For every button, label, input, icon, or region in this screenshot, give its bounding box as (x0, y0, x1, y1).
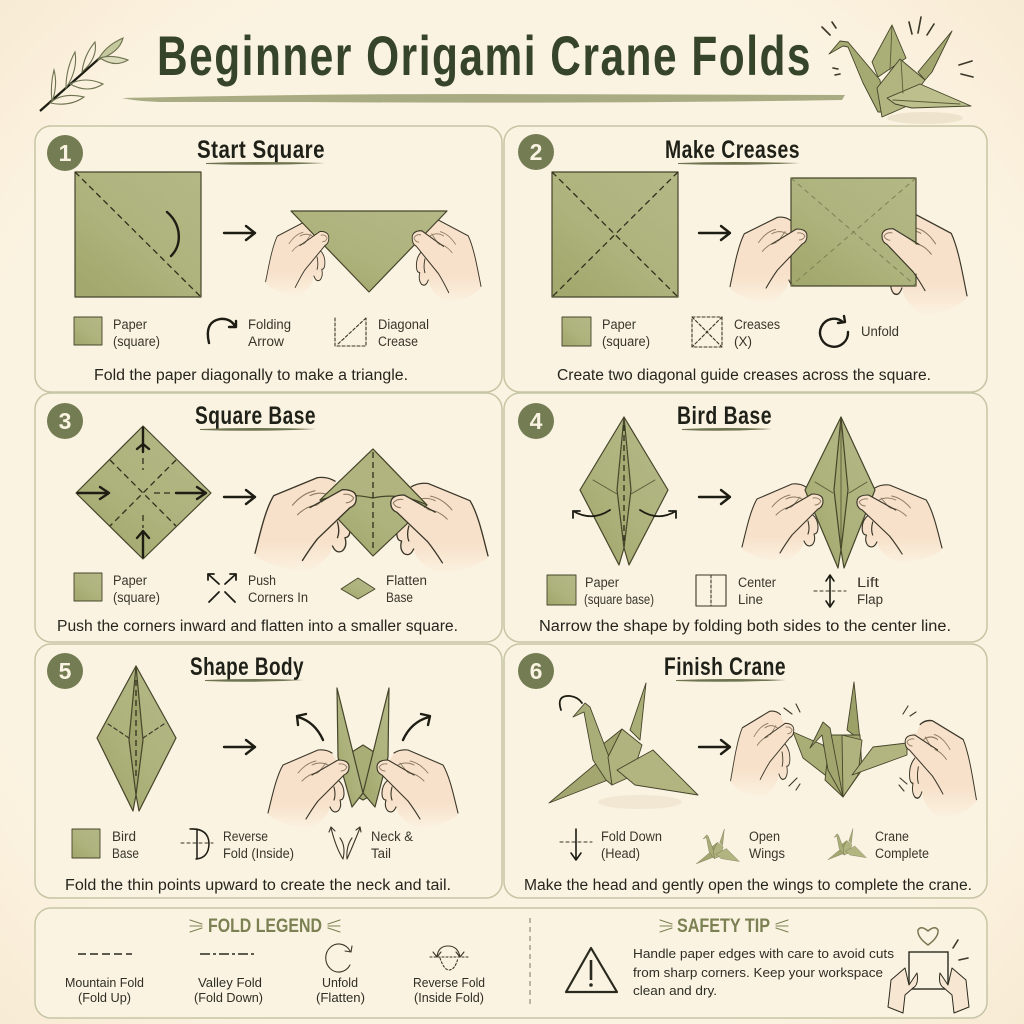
hands holding creased paper (730, 178, 967, 314)
step number 2 (518, 134, 554, 170)
legend: paper square base (547, 575, 654, 607)
hands with neck and tail points and up arrows (268, 688, 458, 827)
hands opening crane wings (731, 682, 976, 817)
reverse fold: Reverse Fold (413, 976, 485, 990)
step number 4: 4 (530, 408, 543, 434)
panel frame (35, 644, 502, 898)
safety text: Handle paper edges with care to avoid cuts (633, 947, 894, 961)
legend: crane complete (828, 829, 929, 861)
legend: crane complete: Complete (875, 846, 929, 861)
legend: diagonal crease (335, 317, 429, 349)
panel: step 3 square base (35, 393, 502, 642)
step number 3: 3 (59, 408, 71, 434)
diamond paper with push arrows (76, 426, 211, 559)
step number 3 (47, 403, 83, 439)
legend: reverse fold (181, 829, 294, 861)
heading underline (676, 679, 786, 682)
panel frame (504, 393, 987, 642)
panel: step 1 start square (35, 126, 502, 392)
legend: paper: (square) (113, 334, 160, 349)
heading: Bird Base (677, 402, 772, 430)
step number 5 (47, 653, 83, 689)
safety text (633, 947, 894, 998)
step number 6 (518, 653, 554, 689)
unfold: Unfold (322, 976, 358, 990)
panel: legend and safety tip (35, 908, 987, 1018)
panel: step 6 finish crane (504, 644, 987, 898)
arrow (699, 226, 730, 240)
panel frame (504, 126, 987, 392)
legend: folding arrow (208, 317, 291, 349)
legend: paper: (square) (602, 334, 650, 349)
step number 1 (47, 135, 83, 171)
step number 2: 2 (530, 139, 542, 165)
heading underline (682, 428, 772, 431)
title: Beginner Origami Crane Folds (157, 24, 812, 87)
heading underline (205, 679, 304, 682)
panel: step 2 make creases (504, 126, 987, 392)
legend: paper: Paper (602, 317, 636, 332)
step number 5: 5 (59, 658, 72, 684)
legend: folding arrow: Folding (248, 317, 291, 332)
step number 1: 1 (59, 140, 72, 166)
legend: neck and tail (329, 827, 413, 861)
legend: paper square base: Paper (585, 575, 619, 590)
panel frame (504, 644, 987, 898)
legend: fold down: Fold Down (601, 829, 662, 844)
title brush stroke (122, 94, 845, 103)
legend: paper: Paper (113, 573, 147, 588)
icon: hands holding paper with heart (888, 928, 969, 1013)
legend: center line: Line (738, 592, 763, 607)
panel frame (35, 126, 502, 392)
legend: open wings (696, 829, 785, 864)
legend: open wings: Wings (749, 846, 785, 861)
legend: center line (696, 575, 776, 607)
bird base kite with side arrows (573, 417, 676, 565)
legend: center line: Center (738, 575, 776, 590)
heading: Shape Body (190, 653, 304, 681)
narrow kite paper (97, 666, 176, 811)
legend: unfold: Unfold (861, 324, 899, 339)
legend: paper: Paper (113, 317, 147, 332)
legend: open wings: Open (749, 829, 780, 844)
arrow (224, 226, 255, 240)
legend: diagonal crease: Diagonal (378, 317, 429, 332)
step number 6: 6 (530, 658, 542, 684)
icon: paper crane with sparkle lines (822, 17, 973, 124)
icon: warning triangle (566, 948, 617, 992)
heading underline (206, 162, 325, 165)
legend: fold down (560, 829, 662, 861)
legend: creases: Creases (734, 317, 780, 332)
legend: flatten base: Base (386, 590, 413, 605)
heading: Start Square (197, 136, 325, 164)
divider (529, 918, 531, 1008)
reverse fold (413, 946, 485, 1005)
legend: reverse fold: Reverse (223, 829, 268, 844)
mountain fold: Mountain Fold (65, 976, 144, 990)
arrow (699, 490, 730, 504)
reverse fold: (Inside Fold) (414, 991, 484, 1005)
step number 4 (518, 403, 554, 439)
legend: push corners in: Corners In (248, 590, 308, 605)
caption: Create two diagonal guide creases across the square. (557, 367, 931, 384)
legend: paper (74, 317, 160, 349)
legend: neck and tail: Neck & (371, 829, 413, 844)
legend: creases: (X) (734, 334, 752, 349)
heading: Finish Crane (664, 653, 786, 681)
valley fold: Valley Fold (198, 976, 262, 990)
hands holding bird base (742, 417, 942, 568)
legend: neck and tail: Tail (371, 846, 391, 861)
legend: bird base (72, 829, 139, 861)
legend: lift flap (814, 575, 883, 607)
caption: Push the corners inward and flatten into a smaller square. (57, 618, 458, 635)
panel frame (35, 393, 502, 642)
legend: push corners in (208, 573, 308, 605)
legend: paper (74, 573, 160, 605)
crane with head arrow (549, 683, 698, 809)
legend: flatten base (341, 573, 427, 605)
legend: fold down: (Head) (601, 846, 640, 861)
legend: reverse fold: Fold (Inside) (223, 846, 294, 861)
panel: step 4 bird base (504, 393, 987, 642)
caption: Fold the thin points upward to create the neck and tail. (65, 877, 451, 894)
valley fold: (Fold Down) (194, 991, 263, 1005)
unfold: (Flatten) (316, 991, 365, 1005)
icon: leaf sprig (40, 38, 128, 111)
square paper with diagonal crease (75, 172, 201, 297)
panel frame (35, 908, 987, 1018)
heading: Square Base (195, 402, 316, 430)
heading: Make Creases (665, 136, 800, 164)
legend: lift flap: Flap (857, 592, 883, 607)
arrow (699, 740, 730, 754)
mountain fold (65, 954, 144, 1005)
legend: paper (562, 317, 650, 349)
heading underline (200, 428, 316, 431)
legend: crane complete: Crane (875, 829, 909, 844)
arrow (224, 740, 255, 754)
legend: folding arrow: Arrow (248, 334, 284, 349)
safety text: clean and dry. (633, 984, 717, 998)
safety text: from sharp corners. Keep your workspace (633, 966, 883, 980)
legend: flatten base: Flatten (386, 573, 427, 588)
hands flattening square base (255, 449, 488, 572)
caption: Narrow the shape by folding both sides to the center line. (539, 618, 951, 635)
fold legend heading: FOLD LEGEND (208, 916, 322, 937)
legend: lift flap: Lift (857, 575, 879, 590)
legend: unfold (820, 316, 899, 347)
mountain fold: (Fold Up) (78, 991, 131, 1005)
safety tip heading: SAFETY TIP (677, 916, 770, 937)
caption: Make the head and gently open the wings to complete the crane. (524, 877, 972, 894)
valley fold (194, 954, 263, 1005)
legend: diagonal crease: Crease (378, 334, 418, 349)
hands holding triangle (266, 211, 481, 301)
arrow (224, 490, 255, 504)
legend: bird base: Bird (112, 829, 136, 844)
legend: push corners in: Push (248, 573, 276, 588)
legend: paper square base: (square base) (584, 592, 654, 607)
square with X creases (552, 172, 678, 297)
legend: bird base: Base (112, 846, 139, 861)
legend: creases (692, 317, 780, 349)
unfold (316, 944, 365, 1005)
caption: Fold the paper diagonally to make a triangle. (94, 367, 408, 384)
panel: step 5 shape body (35, 644, 502, 898)
legend: paper: (square) (113, 590, 160, 605)
heading underline (678, 162, 800, 165)
